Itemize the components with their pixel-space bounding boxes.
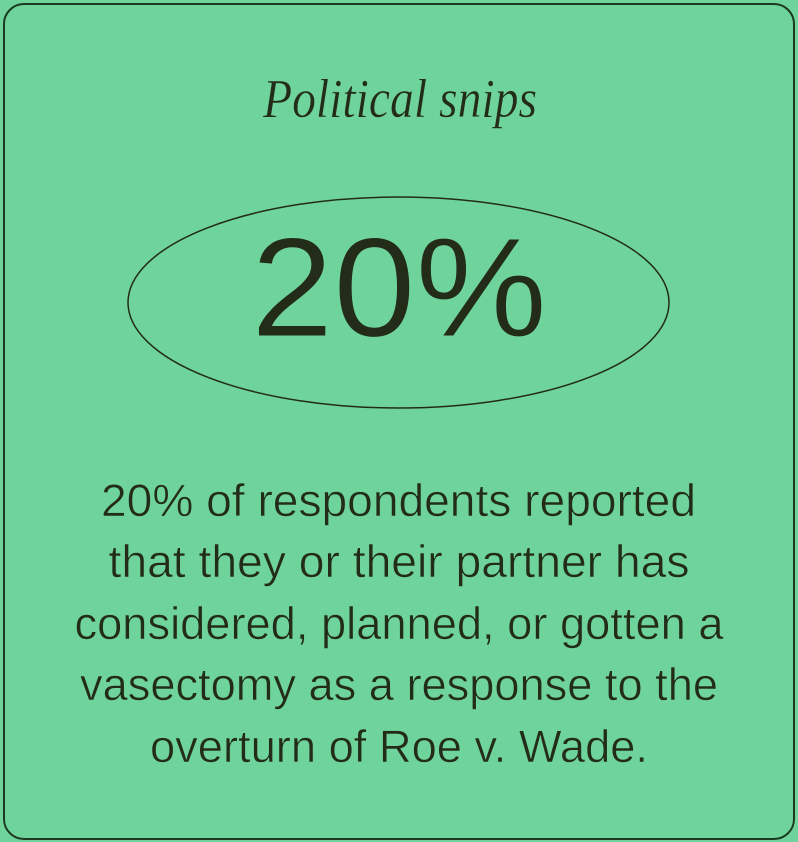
body text block: that they or their partner has	[108, 536, 690, 587]
body text block: overturn of Roe v. Wade.	[150, 721, 648, 772]
body text block: considered, planned, or gotten a	[74, 598, 724, 649]
body text block: 20% of respondents reported	[101, 475, 696, 526]
oval outline	[128, 197, 669, 408]
oval with big statistic	[128, 197, 669, 408]
body text block	[74, 475, 724, 772]
title: Political snips	[262, 68, 537, 129]
body text block: vasectomy as a response to the	[80, 659, 718, 710]
big number: 20%	[251, 208, 547, 366]
